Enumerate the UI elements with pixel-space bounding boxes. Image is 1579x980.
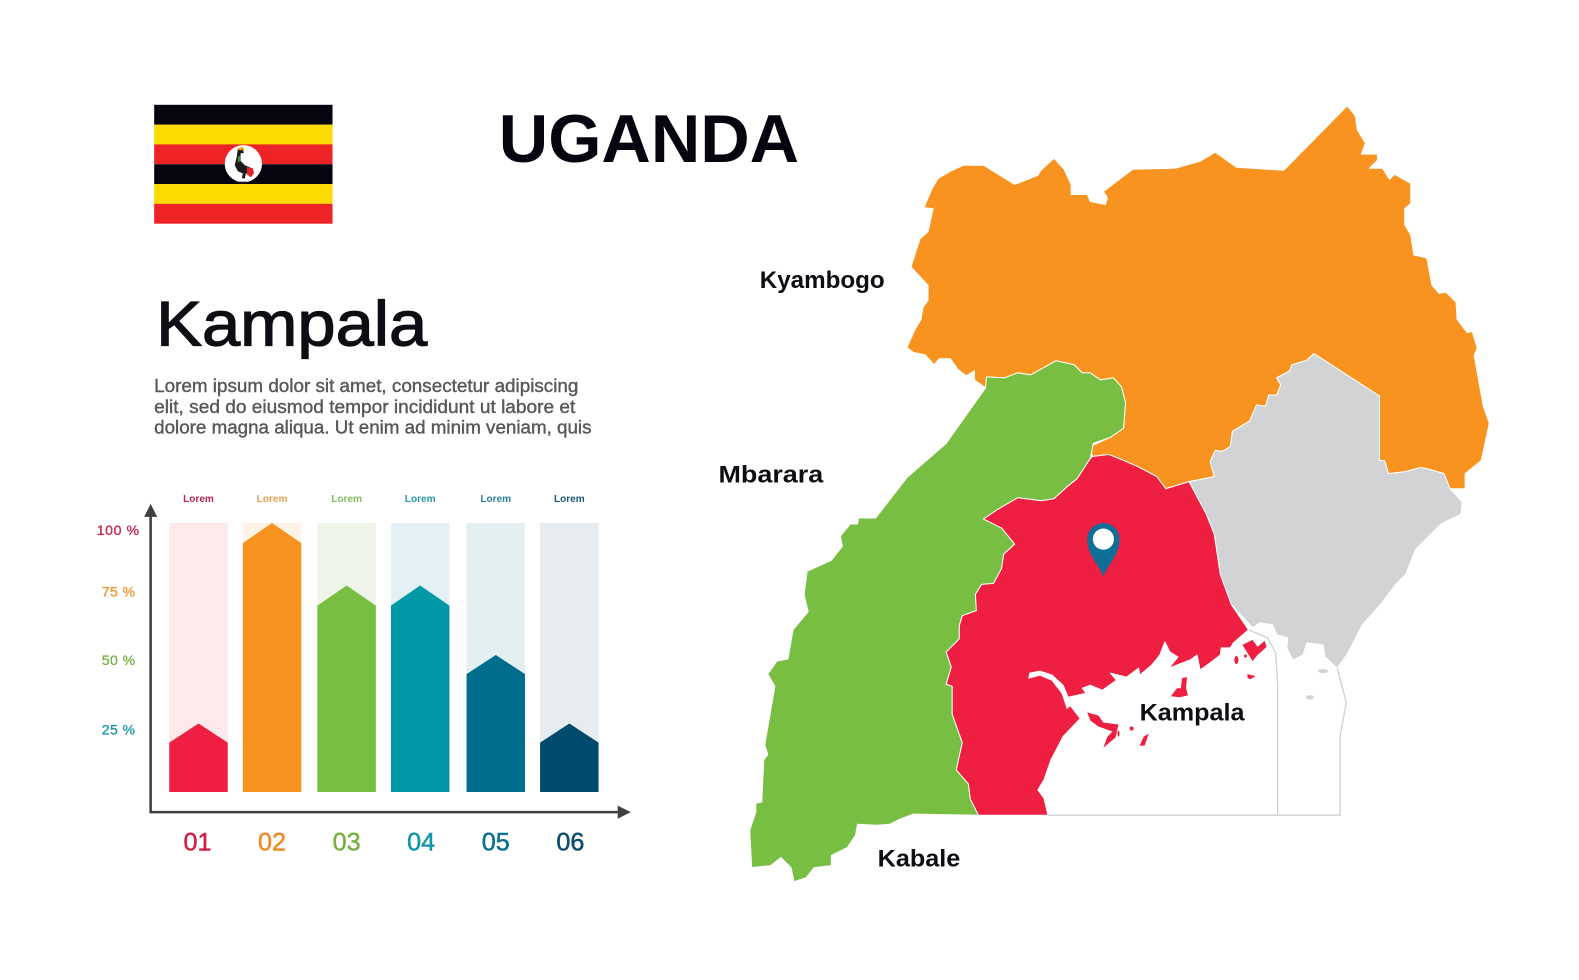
heading: Kampala: Kampala — [156, 290, 428, 360]
text block: description: Lorem ipsum dolor sit amet, consectetur adipiscing — [154, 376, 578, 396]
bar 02: Lorem — [257, 494, 287, 505]
bar 01: Lorem — [183, 494, 214, 505]
bar 02: 02 — [258, 828, 286, 856]
bar 01 — [169, 494, 228, 856]
text block: description: dolore magna aliqua. Ut enim ad minim veniam, quis — [154, 417, 591, 437]
bar 03 — [317, 494, 376, 856]
bar 03: 03 — [333, 828, 361, 856]
bar 04 — [391, 494, 449, 856]
axis labels: 75 % — [102, 584, 135, 600]
map of Uganda — [750, 106, 1489, 882]
bar chart — [97, 494, 631, 856]
icon: flag of Uganda — [154, 105, 333, 224]
bar 04: 04 — [407, 828, 435, 856]
bar 05: Lorem — [480, 494, 511, 505]
axis labels — [97, 522, 140, 738]
region: west (green) — [750, 361, 1126, 882]
map label: Mbarara: Mbarara — [718, 462, 824, 489]
axis labels: 25 % — [102, 722, 135, 738]
bar 01: 01 — [183, 828, 212, 856]
bar 06 — [540, 494, 599, 856]
title: UGANDA — [499, 102, 799, 177]
bar 06: 06 — [556, 828, 584, 856]
icon: location pin — [1087, 523, 1120, 576]
axis labels: 100 % — [97, 522, 140, 538]
axes — [144, 504, 631, 819]
text block: description — [154, 376, 591, 437]
text block: description: elit, sed do eiusmod tempor incididunt ut labore et — [154, 397, 575, 417]
bar 06: Lorem — [554, 494, 585, 505]
region: east (grey) — [1189, 354, 1462, 699]
map label: Kyambogo: Kyambogo — [760, 267, 885, 294]
region: north (orange) — [907, 106, 1489, 489]
map label: Kabale: Kabale — [878, 846, 960, 873]
bar 02 — [243, 494, 301, 856]
outline: lake region border — [1048, 630, 1347, 815]
bar 03: Lorem — [331, 494, 362, 505]
bar 04: Lorem — [405, 494, 436, 505]
region: central (red) — [946, 454, 1267, 815]
axis labels: 50 % — [102, 652, 135, 668]
bar 05: 05 — [482, 828, 510, 856]
map label: Kampala: Kampala — [1140, 699, 1245, 726]
bar 05 — [467, 494, 525, 856]
